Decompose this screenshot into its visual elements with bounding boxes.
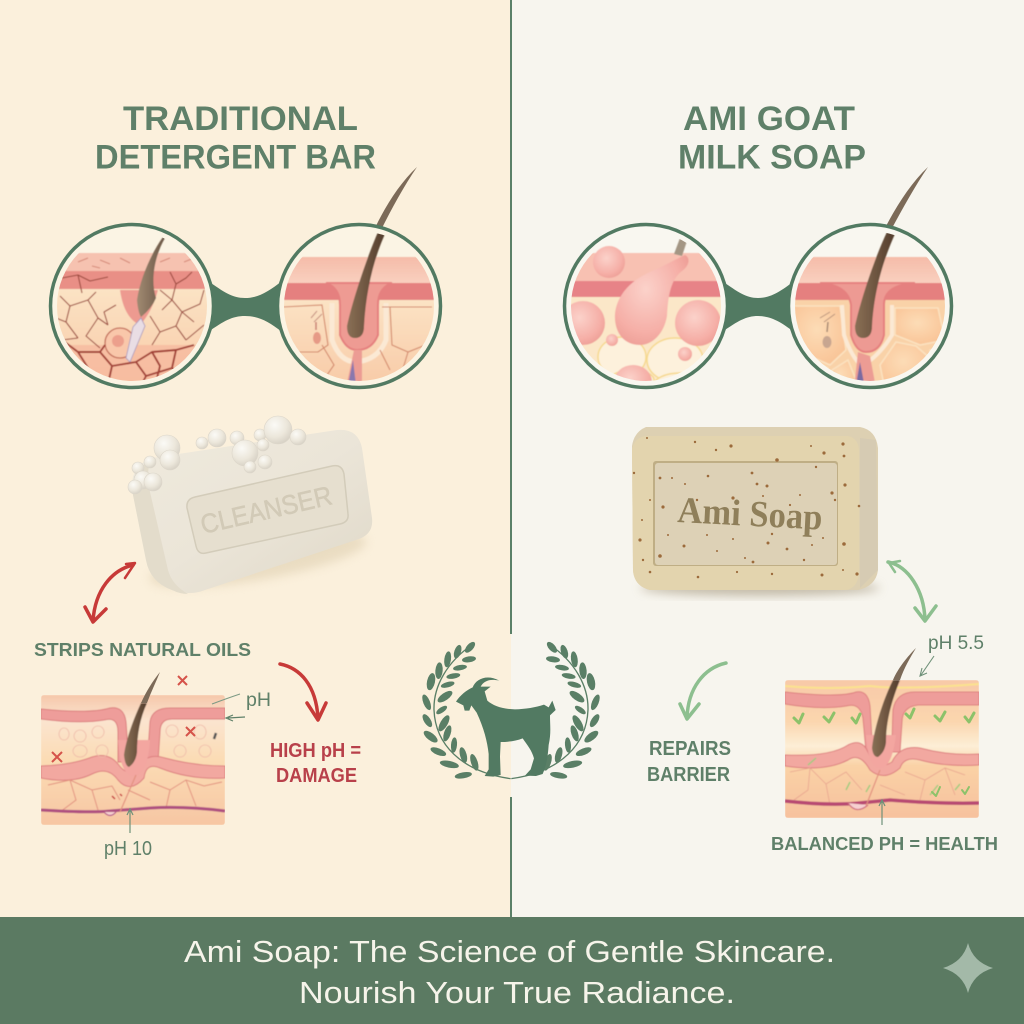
- green check marks: [794, 709, 974, 796]
- red crosses: [52, 676, 195, 762]
- heading: traditional detergent bar: [95, 100, 376, 176]
- label: balanced pH health: BALANCED PH = HEALTH: [771, 833, 998, 854]
- heading: traditional detergent bar: DETERGENT BAR: [95, 138, 376, 176]
- label: repairs barrier: BARRIER: [647, 764, 730, 786]
- label: repairs barrier: REPAIRS: [649, 738, 731, 760]
- label: pH with pointers: [212, 690, 271, 721]
- footer text: Ami Soap: The Science of Gentle Skincare.: [184, 935, 835, 969]
- label: pH with pointers: pH: [246, 690, 271, 711]
- speckles: [633, 437, 860, 578]
- arrow: green from Ami soap: [888, 561, 936, 621]
- arrow: green to repairs barrier: [680, 663, 726, 719]
- bubbles: [128, 416, 306, 494]
- heading: traditional detergent bar: TRADITIONAL: [123, 100, 358, 138]
- logo: goat in laurel wreath: [420, 640, 602, 780]
- footer text: [184, 935, 835, 1010]
- skin circle: inflamed bubbles: [571, 239, 721, 381]
- heading: Ami goat milk soap: AMI GOAT: [683, 100, 855, 138]
- center divider upper: [510, 0, 512, 634]
- skin circle: cracked skin: [57, 238, 207, 381]
- label: pH 5.5 with pointer: pH 5.5: [928, 633, 984, 654]
- arrow: red to high pH damage: [280, 664, 326, 720]
- label: strips natural oils: STRIPS NATURAL OILS: [34, 640, 251, 660]
- label: pH 10 with pointer: pH 10: [104, 838, 152, 860]
- skin circles: acne and healed, right panel: [561, 167, 952, 399]
- label: repairs barrier: [647, 738, 731, 786]
- panel: traditional detergent bar background: [0, 0, 511, 917]
- diagram: damaged skin cross-section: [41, 672, 225, 825]
- soap bar: Ami Soap oatmeal: [632, 427, 880, 596]
- label: high pH damage: DAMAGE: [276, 765, 357, 787]
- label: high pH damage: [270, 740, 361, 787]
- center divider lower: [510, 797, 512, 917]
- soap imprint: CLEANSER: CLEANSER: [198, 480, 335, 540]
- soap bar: white cleanser with bubbles: [128, 416, 372, 599]
- skin circle: repaired skin with follicle: [795, 232, 945, 381]
- footer banner: [0, 917, 1024, 1024]
- label: pH 5.5 with pointer: [920, 633, 984, 676]
- skin circle: normal skin with follicle: [284, 233, 434, 381]
- panel: Ami goat milk soap background: [511, 0, 1024, 917]
- icon: sparkle star: [943, 943, 993, 993]
- label: high pH damage: HIGH pH =: [270, 740, 361, 762]
- arrow: red from cleanser to strips oils: [85, 563, 135, 622]
- soap imprint: Ami Soap: Ami Soap: [677, 490, 823, 539]
- label: pH 10 with pointer: [104, 809, 152, 860]
- heading: Ami goat milk soap: [678, 100, 866, 176]
- heading: Ami goat milk soap: MILK SOAP: [678, 138, 866, 176]
- pointer into healthy skin: [879, 800, 885, 825]
- skin circles: damaged and normal, left panel: [50, 167, 440, 395]
- diagram: healthy skin cross-section: [785, 648, 979, 818]
- footer text: Nourish Your True Radiance.: [299, 976, 735, 1010]
